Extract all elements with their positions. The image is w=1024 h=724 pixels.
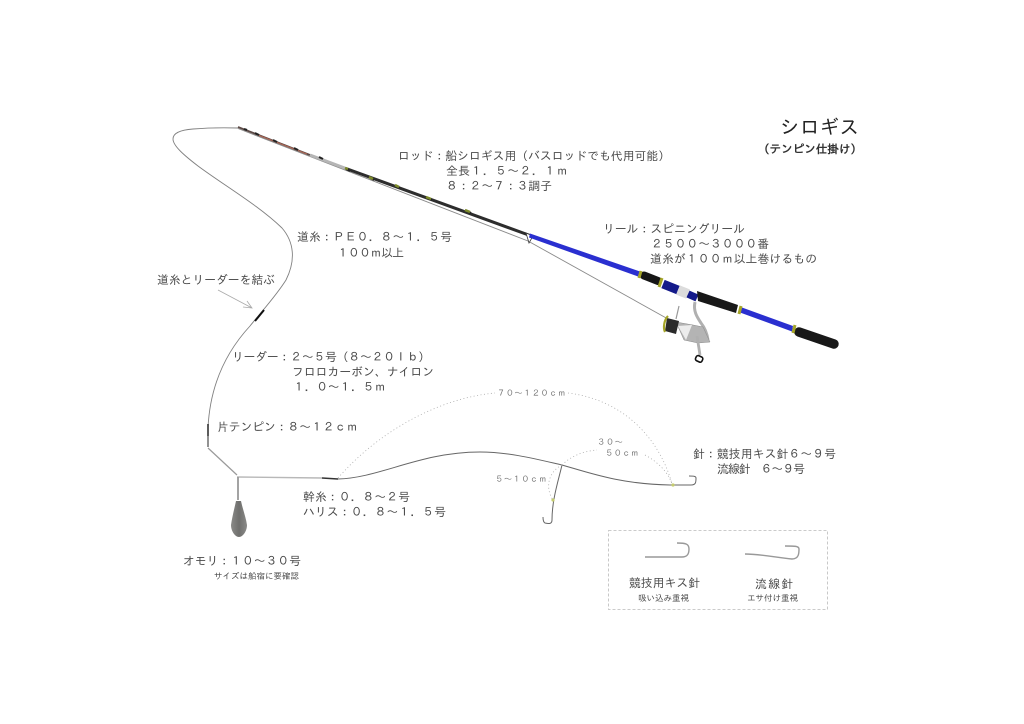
label: hooks [693, 447, 836, 475]
label: rod: 全長１．５～２．１ｍ [446, 165, 568, 177]
dimension arc: 70-120cm [338, 393, 672, 484]
rod silver section [310, 155, 346, 168]
swivel [207, 424, 209, 436]
label: hooks: 針：競技用キス針６～９号 [693, 447, 836, 460]
label: reel: リール：スピニングリール [603, 223, 745, 235]
main line [173, 128, 292, 428]
label: reel: ２５００～３０００番 [651, 238, 769, 250]
competition hook caption: 競技用キス針 [629, 576, 700, 589]
competition hook caption [629, 576, 700, 603]
dimension arc: 5-10cm [549, 465, 562, 500]
spinning reel [664, 302, 710, 363]
rod line running through guides [238, 128, 668, 319]
rod blue section [529, 234, 640, 276]
label: hooks: 流線針 ６～９号 [717, 462, 805, 475]
label: main line: １００ｍ以上 [337, 248, 404, 259]
dimension arc: 30-50cm [562, 450, 672, 484]
title: シロギス [780, 117, 859, 137]
dimension labels: ５～１０ｃｍ [495, 475, 547, 484]
title: （テンピン仕掛け） [758, 142, 862, 155]
title [758, 117, 862, 155]
label: sinker [183, 556, 301, 581]
label: trunk and harris: ハリス：０．８～１．５号 [303, 507, 446, 518]
label: leader [232, 350, 434, 393]
dimension labels: ３０～ [597, 438, 623, 447]
label: tenbin: 片テンピン：８～１２ｃｍ [217, 421, 358, 433]
rod dark section [346, 168, 530, 236]
trunk line and hook [338, 452, 696, 485]
dimension labels: ７０～１２０ｃｍ [497, 389, 566, 398]
label: main line [297, 231, 452, 259]
sinker [231, 501, 247, 537]
reel bail [676, 306, 679, 319]
label: leader: １．０～１．５ｍ [293, 382, 386, 393]
line knot [255, 310, 264, 321]
arrow: knot pointer [218, 290, 252, 308]
label: main line: 道糸：ＰＥ０．８～１．５号 [297, 231, 452, 243]
label: sinker: オモリ：１０～３０号 [183, 556, 301, 567]
rod guides [244, 129, 471, 213]
icon: competition hook [645, 543, 689, 557]
streamlined hook caption [747, 577, 798, 603]
icon: streamlined hook [745, 546, 799, 559]
sinker connector [237, 477, 239, 500]
rod yellow bands [639, 271, 795, 333]
label: reel [603, 223, 817, 265]
panel: hook types [608, 530, 828, 610]
fishing rod [238, 127, 834, 363]
guide triangle [526, 233, 533, 243]
streamlined hook caption: エサ付け重視 [747, 593, 798, 603]
reel stem [694, 302, 708, 340]
rod grips [644, 276, 658, 281]
tenbin arm [208, 448, 237, 475]
streamlined hook caption: 流線針 [755, 577, 793, 590]
label: rod: ロッド：船シロギス用（バスロッドでも代用可能） [398, 149, 670, 162]
label: trunk and harris: 幹糸：０．８～２号 [303, 491, 410, 503]
dimension labels: ５０ｃｍ [605, 449, 639, 458]
competition hook caption: 吸い込み重視 [638, 593, 690, 603]
label: rod: ８：２～７：３調子 [446, 180, 552, 192]
label: sinker: サイズは船宿に要確認 [214, 571, 299, 581]
label: leader: リーダー：２～５号（８～２０ｌｂ） [232, 350, 430, 363]
label: reel: 道糸が１００ｍ以上巻けるもの [650, 252, 817, 265]
branch hook [543, 465, 562, 524]
reel handle [697, 336, 700, 355]
rod tip section [238, 127, 310, 155]
knot points [551, 483, 675, 502]
label: rod [398, 149, 670, 192]
tenbin rig [208, 424, 338, 537]
label: leader: フロロカーボン、ナイロン [292, 366, 434, 378]
reel body [676, 322, 710, 343]
label: knot: 道糸とリーダーを結ぶ [157, 273, 275, 286]
reel spool [665, 318, 679, 334]
dimension labels [495, 389, 639, 484]
label: trunk and harris [303, 491, 446, 518]
